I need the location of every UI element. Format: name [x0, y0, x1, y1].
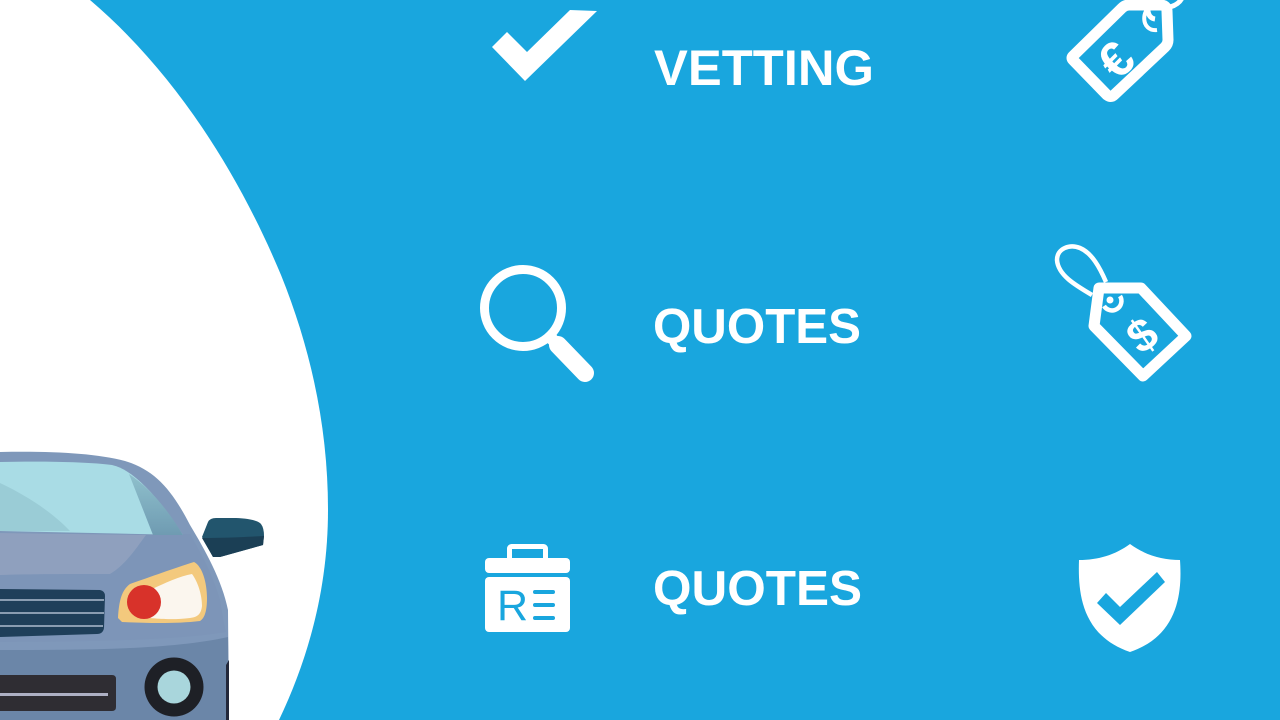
- side mirror: [202, 518, 264, 557]
- windshield: [0, 462, 183, 535]
- currency symbol on tag: €: [1086, 30, 1146, 90]
- icon: check mark: [492, 10, 597, 81]
- headlight: [118, 562, 207, 623]
- label: quotes second: QUOTES: [653, 562, 862, 616]
- label: vetting: VETTING: [654, 40, 874, 96]
- label: quotes: QUOTES: [653, 300, 861, 354]
- car hood: [0, 533, 226, 642]
- car right edge shadow: [226, 660, 229, 720]
- front bumper: [0, 637, 229, 720]
- lower air intake: [0, 675, 116, 711]
- icon: magnifying glass: [484, 270, 585, 373]
- dollar symbol on tag: $: [1117, 306, 1167, 364]
- icon: price tag top: [1072, 0, 1182, 96]
- illustration: car: [0, 452, 264, 720]
- car body: [0, 452, 229, 720]
- icon: briefcase with R: R: [497, 582, 528, 630]
- radiator grille: [0, 589, 105, 637]
- white curved panel: [0, 0, 328, 720]
- fog lamp: [144, 658, 204, 716]
- icon: briefcase with R: [485, 546, 570, 632]
- icon: shield with check: [1079, 544, 1180, 652]
- icon: dollar price tag: [1057, 246, 1186, 376]
